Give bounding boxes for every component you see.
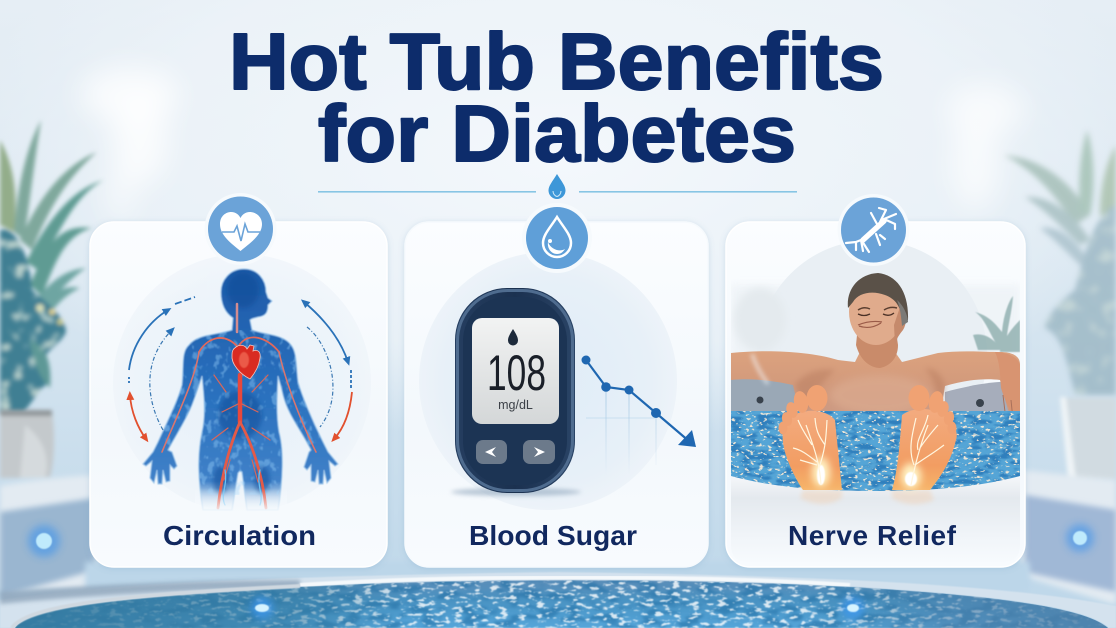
man head — [848, 273, 908, 368]
backdrop disc — [419, 252, 677, 510]
hot tub background — [0, 470, 1116, 628]
panel: blood sugar — [405, 203, 708, 567]
label: blood sugar: Blood Sugar — [469, 520, 637, 551]
left planter — [0, 410, 54, 478]
meter shadow — [451, 488, 581, 496]
circulation arrows — [129, 297, 352, 439]
background plant — [973, 296, 1020, 352]
tub front rim — [731, 476, 1020, 532]
human body with circulatory system — [143, 269, 338, 514]
arteries — [162, 304, 316, 508]
photo scene — [731, 244, 1020, 532]
title: for Diabetes — [318, 89, 796, 178]
title divider with water drop — [318, 174, 797, 199]
icon: heart with pulse — [204, 193, 276, 265]
left foot — [778, 385, 842, 504]
glucose meter — [455, 288, 575, 493]
unit: mg/dL — [498, 398, 533, 412]
backdrop disc — [113, 254, 371, 512]
right plant — [1003, 130, 1116, 395]
blue spa jets — [28, 524, 1094, 619]
nerve glow left — [812, 457, 830, 487]
card background — [90, 222, 387, 567]
right planter — [1060, 397, 1116, 480]
tub wall left — [731, 379, 795, 411]
card background — [726, 222, 1025, 567]
leg fade — [195, 488, 287, 514]
title — [229, 17, 884, 178]
label: circulation: Circulation — [163, 520, 316, 551]
steam — [80, 67, 1025, 225]
meter buttons — [476, 440, 555, 464]
meter screen — [472, 318, 559, 424]
drop symbol — [508, 329, 518, 346]
chart grid lines — [586, 390, 656, 475]
panel: nerve relief — [726, 194, 1025, 567]
tub wall right — [945, 382, 1009, 411]
icon: nerve cell — [838, 194, 910, 266]
splash on arm — [752, 354, 768, 384]
nerve glow right — [901, 463, 921, 489]
panel: circulation — [90, 193, 387, 567]
card background — [405, 222, 708, 567]
heart — [232, 345, 260, 379]
man torso and arms — [731, 351, 1020, 411]
haze backdrop — [734, 289, 1017, 350]
icon: water drop — [522, 203, 592, 273]
left plant — [0, 120, 104, 412]
label: nerve relief: Nerve Relief — [788, 520, 957, 551]
glucose reading: 108 — [487, 345, 546, 401]
title: Hot Tub Benefits — [229, 17, 884, 106]
right foot — [892, 385, 957, 504]
declining trend arrow — [582, 356, 696, 447]
water — [731, 411, 1020, 493]
